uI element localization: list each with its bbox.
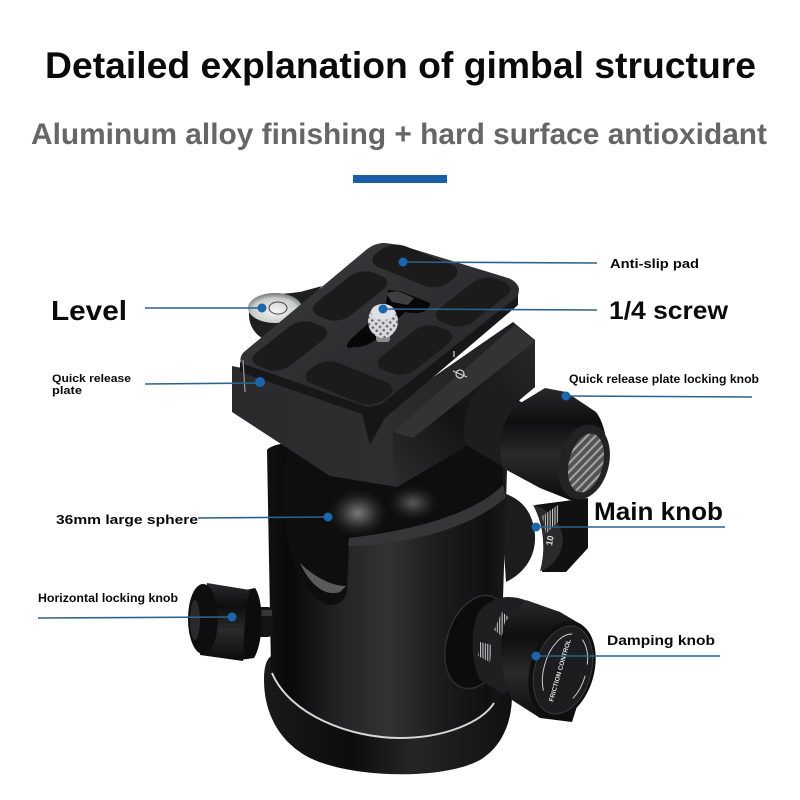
- callout: Level: [51, 295, 266, 326]
- callout: Damping knob: Damping knob: [607, 632, 715, 648]
- clamp side block: [393, 328, 535, 485]
- damping knob: [434, 587, 607, 727]
- plate side rail: [240, 292, 518, 445]
- callout: Main knob: [532, 498, 725, 532]
- white base ring highlight: [272, 673, 494, 738]
- level vial: [248, 286, 322, 342]
- subtitle: Aluminum alloy finishing + hard surface antioxidant: [31, 118, 767, 151]
- accent bar: [353, 175, 447, 183]
- callout: Level: Level: [51, 295, 127, 326]
- callout: Anti-slip pad: [398, 256, 699, 271]
- illustration: ball head: [188, 241, 617, 774]
- 1/4 screw head: [368, 304, 398, 342]
- quick release plate: [240, 243, 519, 407]
- threaded screw stud: [386, 291, 414, 305]
- title: Detailed explanation of gimbal structure: [45, 45, 756, 86]
- clamp top edge: [393, 325, 535, 438]
- horizontal locking knob: [188, 583, 273, 661]
- plate edge highlight: [243, 360, 245, 392]
- screw slot: [347, 290, 430, 348]
- callout: Quick release plate locking knob: Quick release plate locking knob: [569, 374, 759, 386]
- callout: Main knob: Main knob: [594, 498, 723, 526]
- callout: 36mm large sphere: 36mm large sphere: [56, 512, 198, 527]
- clamp body: [232, 322, 535, 487]
- callout: Quick release plate: [52, 373, 265, 397]
- sphere: [328, 485, 439, 537]
- collar highlight: [348, 485, 506, 546]
- clamp marks: [453, 351, 467, 378]
- callout: 1/4 screw: 1/4 screw: [609, 297, 729, 325]
- main knob: [500, 492, 588, 582]
- callout: Anti-slip pad: Anti-slip pad: [610, 256, 699, 271]
- sphere inner rim: [300, 563, 346, 593]
- callout: Horizontal locking knob: [38, 593, 236, 622]
- callout: Quick release plate: Quick release: [52, 373, 131, 385]
- damping knob: FRICTION CONTROL: [548, 638, 573, 703]
- callout: Quick release plate locking knob: [562, 374, 759, 400]
- cylinder body: [267, 440, 507, 738]
- base ring: [264, 655, 512, 774]
- quick release plate locking knob: [464, 385, 617, 505]
- main knob: 10: [544, 535, 556, 546]
- callout: 1/4 screw: [378, 297, 729, 325]
- anti-slip pads: [246, 241, 517, 408]
- callout: Horizontal locking knob: Horizontal locking knob: [38, 593, 178, 605]
- sphere window: [283, 440, 503, 605]
- callout: 36mm large sphere: [56, 512, 332, 527]
- callout: Damping knob: [532, 632, 720, 660]
- callout: Quick release plate: plate: [52, 385, 82, 397]
